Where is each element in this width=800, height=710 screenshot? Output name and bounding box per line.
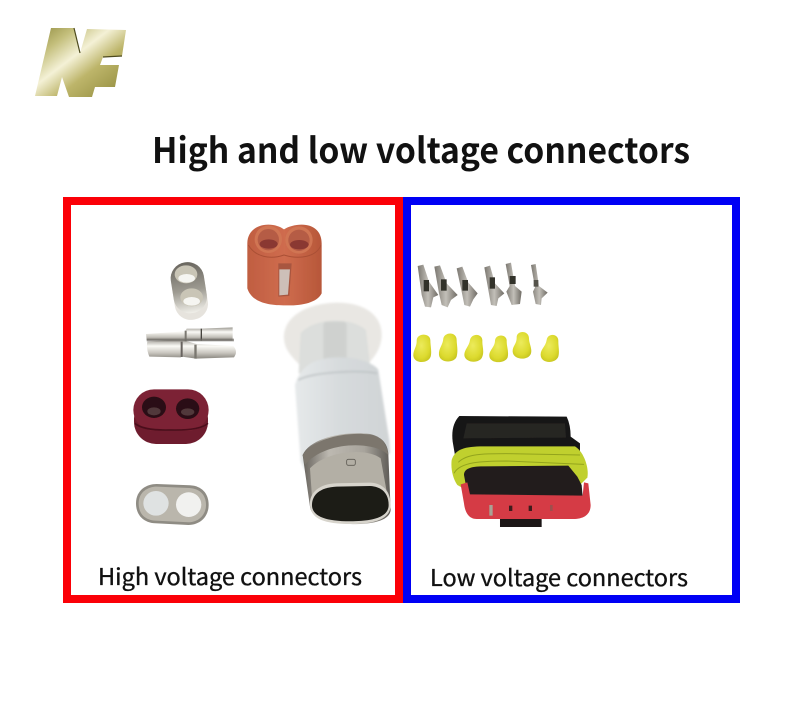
icon: metal sleeve (168, 260, 210, 322)
icon: six yellow rubber seals (413, 332, 559, 362)
icon: dark red rubber seal (133, 389, 209, 444)
title: High and low voltage connectors (152, 123, 690, 174)
panel frame: blue (407, 201, 736, 599)
panel: low voltage connectors (407, 201, 736, 599)
icon: black, yellow and red multi-pin connector (451, 416, 591, 527)
label: high voltage connectors: High voltage connectors (98, 558, 362, 592)
icon: orange double-hole cap (247, 225, 322, 305)
icon: translucent sleeve connector (284, 303, 391, 524)
icon: flat metal washer (136, 484, 209, 525)
panel frame: red (67, 201, 399, 599)
label: low voltage connectors: Low voltage connectors (430, 559, 688, 593)
icon: two metal contact pins (146, 327, 236, 359)
icon: six metal crimp terminals (418, 263, 548, 307)
logo: NF gold mark (35, 28, 126, 97)
panel: high voltage connectors (67, 201, 399, 599)
